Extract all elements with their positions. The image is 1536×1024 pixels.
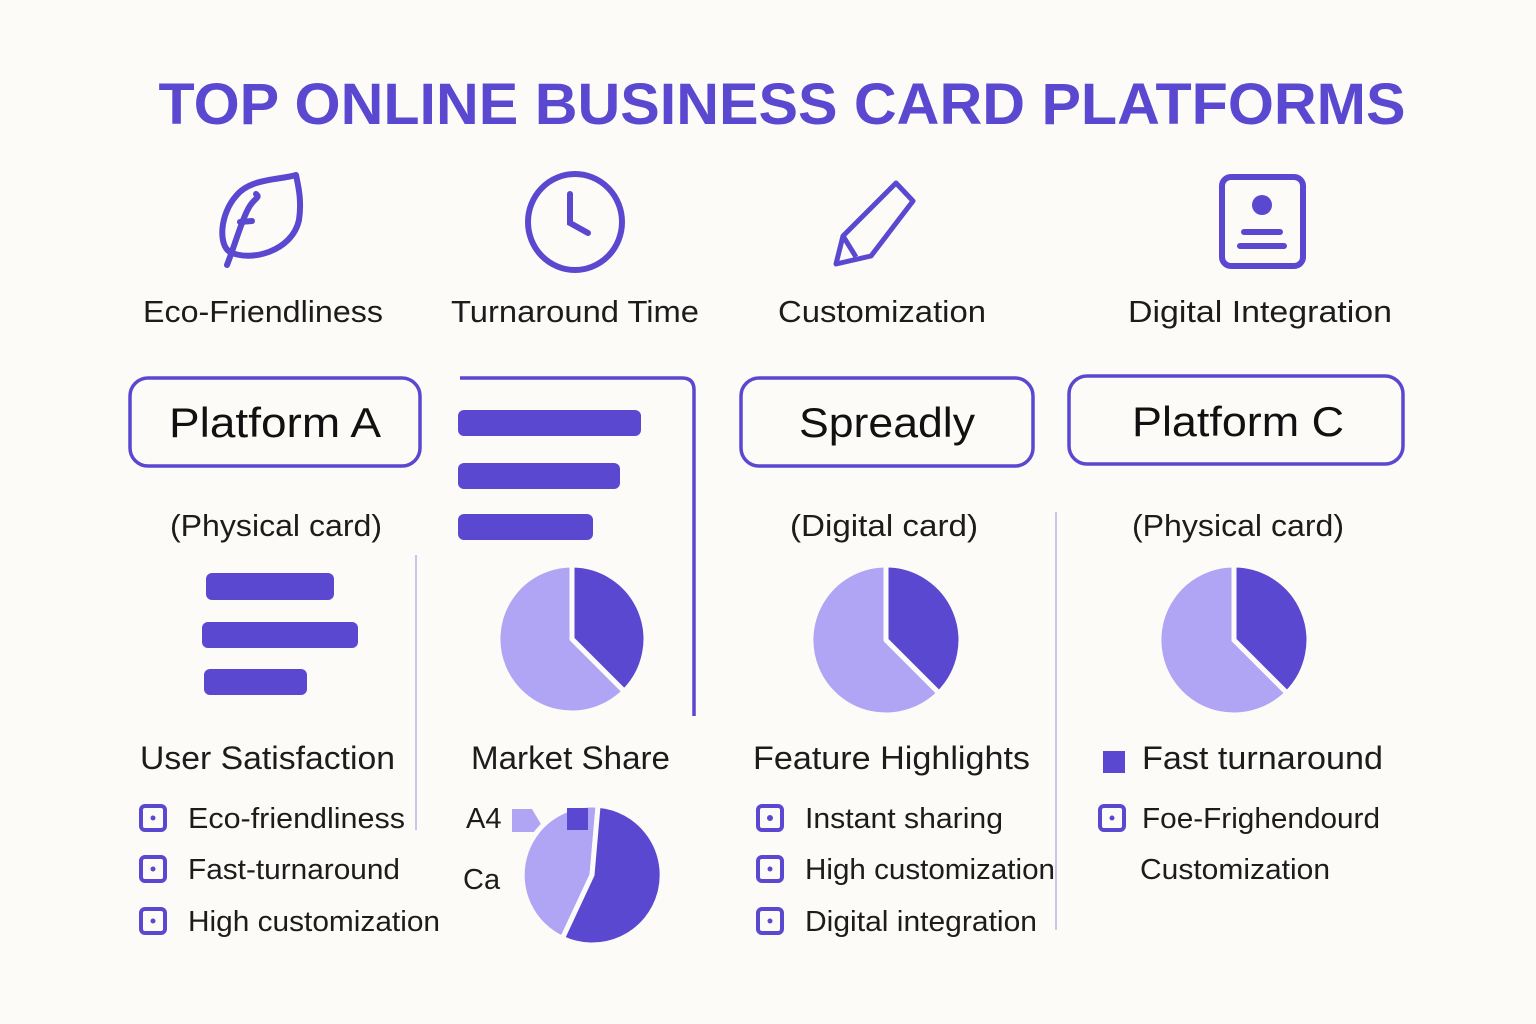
list: spreadly features: High customization xyxy=(805,854,1055,886)
pie chart 3 xyxy=(1159,565,1309,715)
icon: clock xyxy=(528,174,622,270)
market share pie: A4 xyxy=(466,803,501,835)
heading: feature highlights: Feature Highlights xyxy=(753,740,1030,776)
label: customization: Customization xyxy=(778,294,986,329)
list: spreadly features: Digital integration xyxy=(805,906,1037,938)
icon: contact card xyxy=(1222,177,1303,266)
subtitle: physical card A: (Physical card) xyxy=(170,508,382,543)
list: platform C xyxy=(1100,803,1380,886)
market share pie: Ca xyxy=(463,864,501,896)
label: turnaround time: Turnaround Time xyxy=(451,294,699,329)
icon: pencil xyxy=(836,183,913,264)
heading: fast turnaround: Fast turnaround xyxy=(1142,740,1383,776)
subtitle: digital card: (Digital card) xyxy=(790,508,978,543)
subtitle: physical card C: (Physical card) xyxy=(1132,508,1344,543)
pie chart 1 xyxy=(498,565,646,713)
list: platform A: Fast-turnaround xyxy=(188,854,400,886)
list: platform A xyxy=(141,803,440,938)
label: eco-friendliness: Eco-Friendliness xyxy=(143,294,383,329)
panel: bar bracket xyxy=(458,378,694,716)
panel: platform C header: Platform C xyxy=(1132,398,1344,445)
panel: spreadly header xyxy=(741,378,1033,466)
panel: platform A header: Platform A xyxy=(169,399,381,446)
heading: user satisfaction: User Satisfaction xyxy=(140,740,395,776)
panel: platform A header xyxy=(130,378,420,466)
pie chart 2 xyxy=(811,565,961,715)
heading: market share: Market Share xyxy=(471,740,670,776)
list: spreadly features: Instant sharing xyxy=(805,803,1003,835)
panel: spreadly header: Spreadly xyxy=(799,399,975,446)
list: platform A: Eco-friendliness xyxy=(188,803,405,835)
icon: leaf xyxy=(222,175,300,265)
list: spreadly features xyxy=(758,803,1055,938)
bar chart: platform A xyxy=(202,573,358,695)
list: platform C: Customization xyxy=(1140,854,1330,886)
list: platform A: High customization xyxy=(188,906,440,938)
label: digital integration: Digital Integration xyxy=(1128,294,1392,329)
title: TOP ONLINE BUSINESS CARD PLATFORMS xyxy=(158,72,1406,137)
list: platform C: Foe-Frighendourd xyxy=(1142,803,1380,835)
panel: platform C header xyxy=(1069,376,1403,464)
market share pie xyxy=(463,803,662,945)
